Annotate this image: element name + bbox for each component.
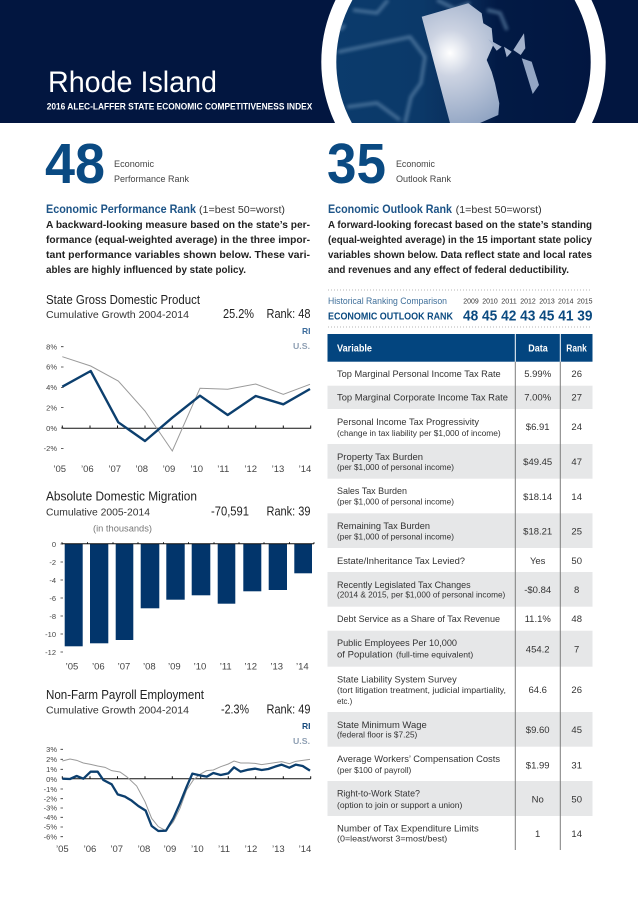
rank caption (114, 159, 189, 185)
table header: Variable (337, 344, 372, 355)
description: A forward-looking forecast based on the state’s standing (328, 219, 592, 231)
y axis labels: -6 (49, 594, 56, 603)
x axis labels: ’09 (168, 662, 181, 672)
legend: RI (302, 326, 310, 336)
row: legislated changes: -$0.84 (524, 585, 551, 596)
row: tax expenditure limits: (0=least/worst 3=most/best) (337, 835, 448, 844)
row: right to work: (option to join or support a union) (337, 801, 463, 810)
row: public employees: 454.2 (526, 644, 550, 655)
table header: Data (528, 344, 548, 355)
x axis labels: ’13 (272, 464, 284, 475)
heading (328, 202, 542, 216)
row: corporate income tax rate: 27 (571, 393, 582, 404)
row: remaining tax (337, 521, 582, 541)
rank caption: Performance Rank (114, 174, 189, 185)
description (46, 219, 310, 276)
row: right to work (337, 789, 582, 810)
chart subtitle: Cumulative 2005-2014 (46, 506, 150, 518)
historical ranking comparison (328, 290, 592, 327)
x axis labels: ’14 (296, 662, 309, 672)
row label: ECONOMIC OUTLOOK RANK (328, 312, 454, 322)
x axis labels: ’07 (110, 844, 123, 855)
rank caption: Economic (114, 159, 154, 170)
row: liability survey: 26 (571, 685, 582, 696)
big rank number 48: 48 (45, 132, 105, 196)
row: minimum wage: (federal floor is $7.25) (337, 731, 418, 740)
row: debt service: 48 (571, 614, 582, 625)
rank caption: Economic (396, 159, 435, 170)
line chart: state gross domestic product (44, 292, 311, 475)
chart title: State Gross Domestic Product (46, 292, 200, 307)
row: tax expenditure limits (337, 824, 582, 844)
legend: RI (302, 721, 310, 731)
row: liability survey: etc.) (337, 697, 353, 706)
x axis labels: ’07 (118, 662, 130, 672)
heading: Economic Outlook Rank (328, 202, 452, 216)
row: minimum wage: $9.60 (526, 725, 550, 736)
bars (65, 544, 312, 646)
row: property tax: (per $1,000 of personal income) (337, 463, 454, 472)
rank values: 48 45 42 43 45 41 39 (463, 308, 592, 324)
bar chart: absolute domestic migration (45, 488, 314, 672)
description (328, 219, 592, 276)
y axis labels: -4 (49, 576, 56, 585)
row: estate tax: Yes (530, 556, 546, 567)
row: personal income tax rate: 5.99% (524, 369, 552, 380)
row: tax expenditure limits: 14 (571, 829, 582, 840)
table header (328, 334, 592, 362)
row: property tax: Property Tax Burden (337, 452, 423, 463)
x axis labels: ’12 (245, 844, 257, 855)
row: remaining tax: Remaining Tax Burden (337, 521, 430, 532)
x axis labels: ’05 (53, 464, 66, 475)
x axis labels: ’12 (244, 662, 257, 672)
x axis labels: ’11 (220, 662, 232, 672)
x axis labels: ’14 (299, 464, 311, 475)
unit note: (in thousands) (93, 524, 152, 534)
row: remaining tax: (per $1,000 of personal income) (337, 532, 454, 541)
rank: Rank: 49 (266, 702, 311, 716)
RI series (62, 765, 310, 831)
row: workers compensation: (per $100 of payroll) (337, 766, 412, 775)
y axis labels: -2% (44, 794, 57, 804)
years: 2009 (463, 297, 479, 306)
chart subtitle: Cumulative Growth 2004-2014 (46, 309, 189, 321)
rank: Rank: 48 (266, 307, 311, 321)
header banner (0, 0, 638, 123)
description: variables shown below. Data reflect state and local rates (328, 249, 592, 261)
x axis labels: ’07 (108, 464, 121, 475)
row: corporate income tax rate: Top Marginal Corporate Income Tax Rate (337, 393, 508, 404)
y axis labels (45, 540, 56, 657)
row: legislated changes: 8 (574, 585, 579, 596)
x axis labels: ’08 (143, 662, 156, 672)
years: 2011 (501, 297, 517, 306)
x axis labels: ’12 (244, 464, 257, 475)
line chart: non-farm payroll employment (44, 687, 311, 855)
y axis labels: 0% (46, 424, 57, 433)
row: legislated changes: Recently Legislated Tax Changes (337, 580, 471, 591)
panel: economic outlook rank (327, 132, 592, 276)
y axis labels: -2% (44, 444, 57, 453)
row: estate tax: Estate/Inheritance Tax Levied? (337, 556, 465, 567)
x axis labels (53, 464, 311, 475)
row: sales tax: (per $1,000 of personal income) (337, 498, 454, 507)
row: sales tax: Sales Tax Burden (337, 486, 407, 497)
comparison label: Historical Ranking Comparison (328, 296, 447, 307)
row: sales tax: $18.14 (523, 492, 552, 503)
x axis labels: ’06 (92, 662, 105, 672)
row: corporate income tax rate: 7.00% (524, 393, 552, 404)
y axis labels: -5% (44, 823, 57, 832)
heading: (1=best 50=worst) (199, 205, 285, 216)
y axis labels: -4% (44, 813, 57, 822)
RI series (62, 371, 310, 441)
years: 2014 (558, 297, 574, 306)
title: Rhode Island (48, 66, 217, 99)
y axis labels: 8% (46, 342, 57, 352)
row: public employees: 7 (574, 644, 579, 655)
heading: Economic Performance Rank (46, 202, 196, 216)
y axis labels: -2 (49, 558, 56, 567)
description: ables are highly influenced by state policy. (46, 264, 246, 276)
x axis labels: ’14 (299, 844, 311, 855)
row: sales tax (337, 486, 582, 507)
x axis labels: ’13 (270, 662, 283, 672)
row: workers compensation: $1.99 (526, 760, 550, 771)
U.S. series (62, 759, 310, 831)
chart title: Non-Farm Payroll Employment (46, 687, 204, 702)
x axis labels (66, 662, 309, 672)
description: tant performance variables shown below. These vari- (46, 249, 310, 261)
row: estate tax: 50 (571, 556, 582, 567)
big rank number 35: 35 (327, 132, 386, 196)
heading: (1=best 50=worst) (456, 205, 542, 216)
y axis labels: -1% (44, 785, 57, 794)
x axis labels: ’06 (81, 464, 94, 475)
row: liability survey: (tort litigation treatment, judicial impartiality, (337, 686, 506, 695)
row: remaining tax: $18.21 (523, 526, 552, 537)
row: property tax: $49.45 (523, 457, 552, 468)
x axis labels: ’06 (84, 844, 96, 855)
years (463, 297, 592, 306)
row: sales tax: 14 (571, 492, 582, 503)
y axis labels (44, 745, 57, 841)
row: debt service: 11.1% (525, 614, 551, 625)
description: (equal-weighted average) in the 15 important state policy (328, 234, 592, 246)
row: estate tax (337, 556, 582, 567)
x axis labels: ’11 (217, 464, 229, 475)
y axis labels: -10 (45, 630, 56, 639)
y axis labels: 2% (46, 404, 57, 412)
row: personal income tax rate (337, 369, 582, 380)
row: public employees: of Population (337, 650, 393, 661)
row: property tax (337, 452, 582, 472)
y axis labels: 2% (46, 755, 57, 764)
description: formance (equal-weighted average) in the three impor- (46, 234, 310, 246)
heading (46, 202, 285, 216)
x axis labels (56, 844, 311, 855)
years: 2012 (520, 297, 536, 306)
y axis labels: -8 (49, 612, 56, 621)
row: property tax: 47 (571, 457, 582, 468)
x axis labels: ’05 (66, 662, 78, 672)
row: tax expenditure limits: 1 (535, 829, 540, 840)
U.S. series (62, 357, 310, 451)
row: minimum wage (337, 720, 582, 740)
row: legislated changes (337, 580, 579, 600)
description: A backward-looking measure based on the state’s per- (46, 219, 310, 231)
rank: Rank: 39 (266, 504, 311, 518)
table header: Rank (566, 344, 587, 355)
x axis labels: ’10 (194, 662, 206, 672)
row: right to work: No (532, 794, 544, 805)
row: public employees: (full-time equivalent) (396, 651, 474, 660)
row: progressivity: (change in tax liability per $1,000 of income) (337, 429, 501, 438)
x axis labels: ’08 (135, 464, 148, 475)
y axis labels: 1% (46, 765, 57, 774)
x axis labels: ’10 (190, 464, 203, 475)
x axis labels: ’05 (56, 844, 69, 855)
row: workers compensation: Average Workers’ Compensation Costs (337, 754, 500, 765)
row: progressivity: Personal Income Tax Progressivity (337, 417, 479, 428)
x axis labels: ’08 (138, 844, 150, 855)
years: 2010 (482, 297, 498, 306)
row: workers compensation (337, 754, 582, 775)
row: progressivity: 24 (571, 422, 582, 433)
x axis labels: ’13 (272, 844, 285, 855)
panel: economic performance rank (45, 132, 310, 276)
legend: U.S. (293, 736, 310, 746)
row: remaining tax: 25 (571, 526, 582, 537)
rank caption (396, 159, 451, 185)
y axis labels: 0 (52, 540, 56, 549)
rank caption: Outlook Rank (396, 174, 451, 185)
years: 2013 (539, 297, 555, 306)
chart title: Absolute Domestic Migration (46, 488, 197, 504)
row: progressivity (337, 417, 582, 438)
row: workers compensation: 31 (571, 760, 582, 771)
x axis labels: ’09 (163, 464, 175, 475)
row: legislated changes: (2014 & 2015, per $1,000 of personal income) (337, 591, 506, 600)
legend: U.S. (293, 341, 310, 351)
row: personal income tax rate: 26 (571, 369, 582, 380)
y axis labels: 4% (46, 383, 57, 392)
row: liability survey (337, 674, 582, 706)
row: minimum wage: 45 (571, 725, 582, 736)
row: liability survey: 64.6 (528, 685, 547, 696)
x axis labels: ’09 (164, 844, 176, 855)
chart subtitle: Cumulative Growth 2004-2014 (46, 704, 189, 716)
row: debt service: Debt Service as a Share of Tax Revenue (337, 614, 500, 625)
row: tax expenditure limits: Number of Tax Expenditure Limits (337, 824, 479, 835)
y axis labels (44, 342, 57, 453)
subtitle: 2016 ALEC-LAFFER STATE ECONOMIC COMPETITIVENESS INDEX (47, 102, 313, 112)
x axis labels: ’10 (191, 844, 204, 855)
row: progressivity: $6.91 (526, 422, 550, 433)
icon: Rhode Island map in ring (321, 0, 606, 123)
y axis labels: -6% (44, 832, 57, 841)
y axis labels: 6% (46, 362, 57, 372)
x axis labels: ’11 (218, 844, 230, 855)
y axis labels: 0% (46, 775, 57, 784)
row: public employees: Public Employees Per 10,000 (337, 638, 457, 649)
row: minimum wage: State Minimum Wage (337, 720, 427, 731)
y axis labels: -3% (44, 804, 57, 813)
y axis labels: 3% (46, 745, 57, 754)
legend (293, 326, 310, 351)
y axis labels: -12 (45, 648, 56, 657)
row: personal income tax rate: Top Marginal Personal Income Tax Rate (337, 369, 501, 380)
value: 25.2% (223, 307, 254, 321)
description: and revenues and any effect of federal deductibility. (328, 264, 569, 276)
row: right to work: Right-to-Work State? (337, 789, 420, 800)
value: -2.3% (221, 702, 249, 716)
row: public employees (337, 638, 579, 661)
value: -70,591 (211, 504, 249, 518)
row: right to work: 50 (571, 794, 582, 805)
row: debt service (337, 614, 582, 625)
row: liability survey: State Liability System Survey (337, 674, 457, 685)
years: 2015 (577, 297, 592, 306)
table: policy variables (328, 334, 592, 850)
legend (293, 721, 310, 746)
